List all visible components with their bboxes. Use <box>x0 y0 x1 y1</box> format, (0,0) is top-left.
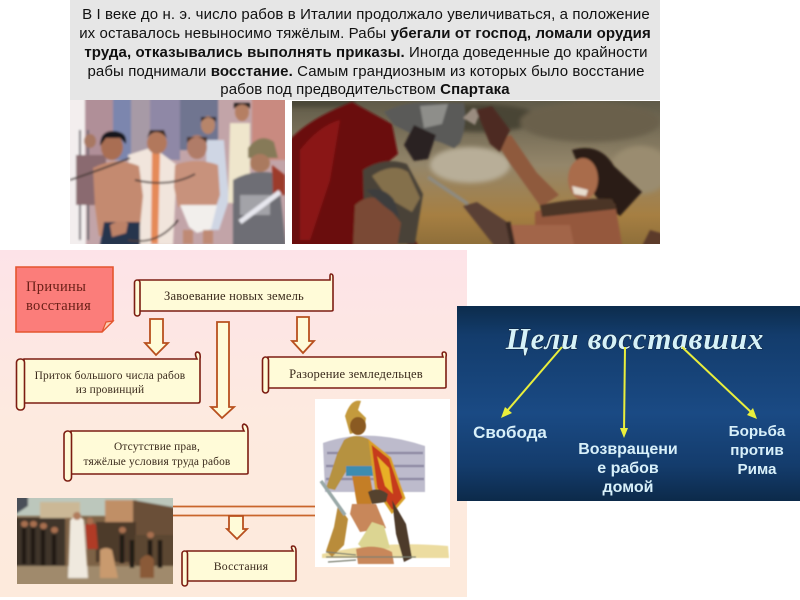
arrow: to fight against Rome <box>682 347 757 419</box>
arrow: to return home <box>620 347 628 438</box>
figure: back men <box>206 140 229 230</box>
text block: introduction: рабов под предводительством Спартака <box>220 81 510 98</box>
scroll: influx of slaves: из провинций <box>76 384 144 396</box>
gladiator head <box>568 158 598 200</box>
text block: introduction: их оставалось невыносимо тяжёлым. Рабы убегали от господ, ломали орудия <box>79 25 651 42</box>
shield <box>370 442 404 512</box>
scroll: lack of rights: тяжёлые условия труда рабов <box>84 456 230 468</box>
scroll: influx of slaves <box>16 352 200 410</box>
scroll: lack of rights <box>64 424 248 481</box>
sword <box>428 177 468 204</box>
legs <box>392 500 412 562</box>
photo: chained slaves led by a Roman soldier <box>70 100 285 244</box>
label: fight against Rome: против <box>730 442 784 459</box>
sword <box>321 481 345 515</box>
arrow: causes to uprising <box>227 516 247 539</box>
panel: causes of the uprising <box>0 250 467 597</box>
label: fight against Rome: Борьба <box>729 423 786 440</box>
label: return of slaves home <box>578 441 678 496</box>
heading: goals of the rebels: Цели восставших <box>505 321 764 356</box>
figure: middle bare-chested man <box>174 161 220 207</box>
gladiator torso and other arm <box>534 208 622 244</box>
gladiator arm up <box>500 135 559 206</box>
armour and arm <box>363 161 423 244</box>
scroll: uprising: Восстания <box>214 559 269 573</box>
text block: introduction: труда, отказывались выполнять приказы. Иногда доведенные до крайности <box>84 44 648 61</box>
fallen man <box>368 489 388 504</box>
figure: robed man left-centre <box>128 147 177 245</box>
scroll: conquest of new lands <box>134 274 333 316</box>
image: slave market scene <box>17 498 173 584</box>
text block: introduction: рабы поднимали восстание. Самым грандиозным из которых было восстание <box>87 63 645 80</box>
arrow: conquest to slave influx <box>145 319 168 355</box>
arrow: conquest to ruin of farmers <box>292 317 314 353</box>
text block: introduction: В I веке до н. э. число рабов в Италии продолжало увеличиваться, а положение <box>82 6 650 23</box>
label: fight against Rome <box>729 423 786 478</box>
panel: goals of the rebels <box>457 306 800 501</box>
scroll: lack of rights: Отсутствие прав, <box>114 441 200 453</box>
image: gladiator victorious over opponent <box>315 399 450 567</box>
gladiator <box>345 401 366 434</box>
label: fight against Rome: Рима <box>738 461 777 478</box>
note: causes heading <box>16 267 113 332</box>
figure: soldier <box>233 172 286 246</box>
text block: introduction <box>70 0 660 100</box>
label: return of slaves home: домой <box>603 479 653 496</box>
scroll: influx of slaves: Приток большого числа рабов <box>35 370 185 382</box>
arrow: to freedom <box>501 347 562 418</box>
note: causes heading: Причины <box>26 279 86 295</box>
red cape <box>292 101 400 244</box>
figure: left bare-chested man <box>93 161 143 236</box>
label: return of slaves home: Возвращени <box>578 441 678 458</box>
scroll: conquest of new lands: Завоевание новых земель <box>164 289 304 303</box>
label: return of slaves home: е рабов <box>597 460 659 477</box>
helmet <box>384 102 465 148</box>
arrow: conquest to lack of rights <box>211 322 234 418</box>
note: causes heading: восстания <box>26 298 91 314</box>
photo: Roman soldier fighting gladiator <box>292 101 660 244</box>
scroll: ruin of farmers <box>262 352 446 393</box>
scroll: uprising <box>182 546 296 586</box>
scroll: ruin of farmers: Разорение земледельцев <box>289 367 423 381</box>
connector lines between images <box>172 506 316 516</box>
gladiator hair <box>572 148 642 216</box>
label: freedom: Свобода <box>473 423 547 442</box>
